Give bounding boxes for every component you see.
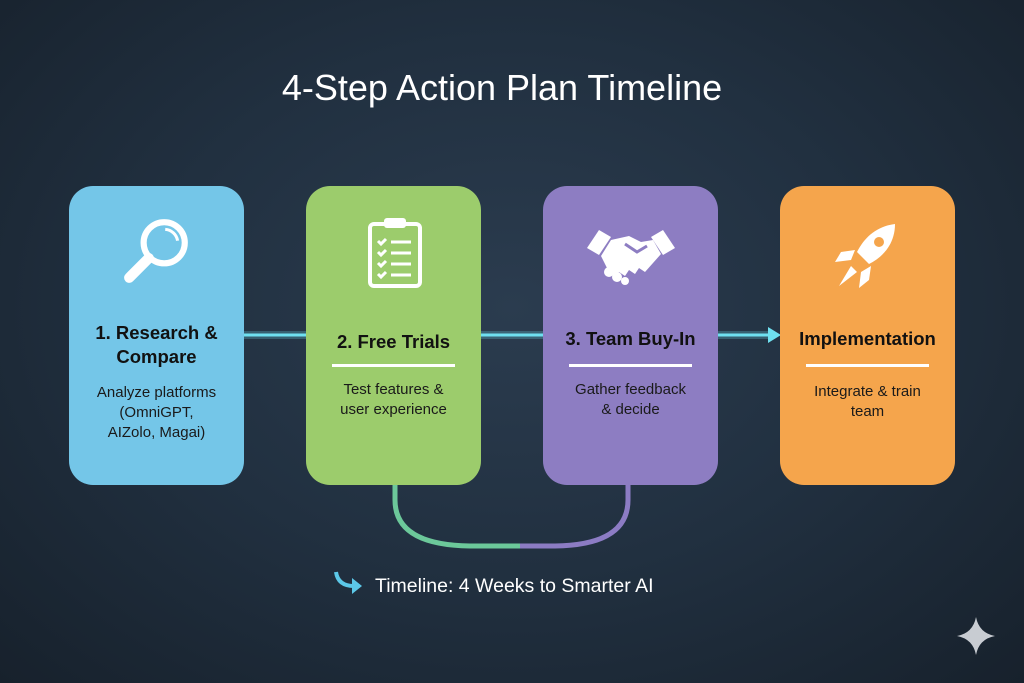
text: [814, 383, 921, 420]
heading: 1. Research &: [95, 322, 218, 343]
icon: curved arrow: [334, 572, 362, 594]
text: user experience: [340, 401, 447, 418]
card 4: [780, 186, 955, 485]
icon: sparkle: [957, 617, 995, 655]
timeline caption: Timeline: 4 Weeks to Smarter AI: [375, 575, 654, 597]
text: team: [851, 403, 884, 420]
text: Gather feedback: [575, 381, 686, 398]
heading: 2. Free Trials: [337, 331, 450, 352]
card 3: [543, 186, 718, 485]
text: [340, 381, 447, 418]
text: [575, 381, 686, 418]
icon: rocket: [835, 224, 895, 288]
title: 4-Step Action Plan Timeline: [282, 67, 722, 108]
heading: 3. Team Buy-In: [565, 328, 696, 349]
card 1: [69, 186, 244, 485]
card 2: [306, 186, 481, 485]
text: Test features &: [343, 381, 444, 398]
heading: Implementation: [799, 328, 936, 349]
text: Integrate & train: [814, 383, 921, 400]
text: Analyze platforms: [97, 384, 216, 401]
text: (OmniGPT,: [119, 404, 194, 421]
text: & decide: [601, 401, 660, 418]
text: AIZolo, Magai): [108, 424, 205, 441]
icon: magnifier: [124, 219, 188, 283]
text: [97, 384, 216, 441]
heading: Compare: [116, 346, 197, 367]
U-curve connector: [392, 485, 630, 548]
heading: [95, 322, 218, 367]
icon: handshake: [587, 230, 675, 285]
icon: clipboard: [368, 218, 422, 288]
